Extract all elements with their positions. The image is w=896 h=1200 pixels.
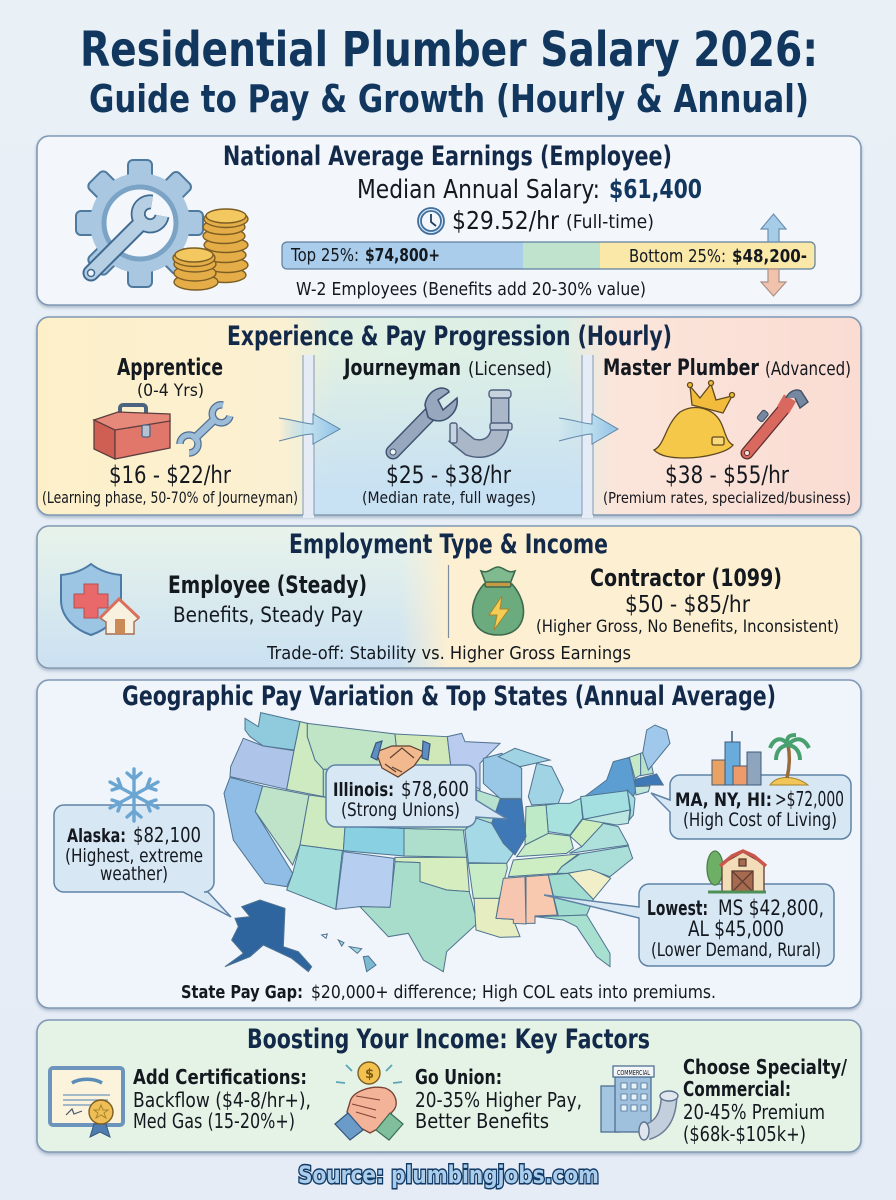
- icon: gear and wrench: [76, 160, 203, 287]
- callout: lowest states: [544, 851, 834, 966]
- column: apprentice: [42, 355, 298, 507]
- icon: pipe wrench: [744, 390, 808, 456]
- range bar: [282, 242, 815, 269]
- callout: MA NY HI: MA, NY, HI:: [675, 789, 772, 811]
- journeyman rate: $25 - $38/hr: [386, 461, 511, 489]
- callout: Alaska: [54, 769, 231, 917]
- callout: Illinois: (Strong Unions): [341, 799, 460, 821]
- union text: Go Union:: [415, 1065, 502, 1089]
- heading: experience: Experience & Pay Progression (Hourly): [227, 321, 672, 352]
- apprentice rate: $16 - $22/hr: [109, 461, 231, 489]
- callout: Alaska: weather): [100, 863, 168, 885]
- master label: (Advanced): [765, 358, 851, 380]
- union text: [415, 1065, 582, 1133]
- map: United States by state pay: [224, 713, 670, 972]
- callout: lowest states: MS $42,800,: [718, 896, 824, 920]
- range bar: Top 25%:: [290, 245, 359, 266]
- note: state pay gap: State Pay Gap:: [181, 982, 303, 1003]
- callout: MA NY HI: [651, 731, 851, 839]
- icon: adjustable wrench: [390, 388, 457, 455]
- hourly rate: [452, 206, 654, 235]
- callout: lowest states: (Lower Demand, Rural): [651, 939, 821, 961]
- certifications text: [133, 1065, 311, 1133]
- icon: crown and hard hat: [654, 380, 734, 458]
- icon: money bag: [472, 567, 524, 635]
- union text: Better Benefits: [415, 1109, 549, 1133]
- journeyman label: Journeyman: [342, 356, 461, 381]
- panel: geographic pay variation: [37, 680, 861, 1008]
- note: state pay gap: [181, 982, 716, 1003]
- journeyman note: (Median rate, full wages): [362, 488, 536, 507]
- arrow: apprentice to journeyman: [279, 414, 340, 444]
- callout: lowest states: Lowest:: [647, 896, 708, 920]
- median annual salary: Median Annual Salary:: [357, 175, 600, 205]
- title: [80, 22, 818, 121]
- apprentice label: Apprentice: [117, 355, 223, 381]
- apprentice note: (Learning phase, 50-70% of Journeyman): [42, 488, 298, 507]
- callout: Alaska: (Highest, extreme: [65, 845, 203, 867]
- master label: Master Plumber: [603, 356, 759, 381]
- panel: employment type and income: [37, 526, 861, 668]
- icon: spanner: [180, 405, 230, 453]
- specialty text: 20-45% Premium: [683, 1100, 825, 1124]
- contractor block: Contractor (1099): [590, 564, 782, 592]
- certifications text: Backflow ($4-8/hr+),: [133, 1088, 311, 1112]
- icon: shield with house: [61, 564, 139, 635]
- icon: coin stacks: [173, 209, 248, 290]
- certifications text: Med Gas (15-20%+): [133, 1109, 295, 1133]
- arrow: journeyman to master: [559, 414, 618, 444]
- panel: experience and pay progression: [37, 317, 861, 518]
- icon: clock: [418, 208, 444, 234]
- icon: clasped hands with coin: $: [365, 1067, 374, 1082]
- specialty text: [683, 1055, 848, 1146]
- master rate: $38 - $55/hr: [665, 461, 789, 489]
- callout: Illinois: $78,600: [401, 777, 469, 801]
- icon: pipe: [450, 390, 512, 449]
- callout: Illinois: [326, 741, 507, 827]
- icon: commercial building and pipe: [601, 1066, 678, 1140]
- certifications text: Add Certifications:: [133, 1065, 307, 1089]
- employee block: [168, 571, 367, 627]
- note: state pay gap: $20,000+ difference; High COL eats into premiums.: [311, 982, 716, 1003]
- callout: MA NY HI: >$72,000: [775, 787, 844, 811]
- range bar: Bottom 25%:: [629, 246, 726, 267]
- icon: snowflake: [110, 769, 158, 821]
- icon: clasped hands with coin: [335, 1062, 403, 1140]
- hourly rate: $29.52/hr: [452, 206, 560, 235]
- callout: Illinois: Illinois:: [333, 779, 394, 801]
- column: journeyman: [342, 356, 552, 507]
- icon: city and palm: [712, 731, 809, 785]
- column: master plumber: [603, 356, 851, 507]
- heading: employment type: Employment Type & Income: [289, 529, 608, 560]
- hourly rate: (Full-time): [566, 211, 654, 233]
- employee block: Benefits, Steady Pay: [173, 603, 363, 627]
- callout: Alaska: $82,100: [133, 823, 201, 847]
- icon: certificate: [50, 1068, 123, 1137]
- icon: toolbox: [94, 405, 170, 459]
- apprentice years: (0-4 Yrs): [137, 381, 204, 401]
- icon: handshake: [371, 741, 430, 777]
- employee block: Employee (Steady): [168, 571, 367, 599]
- journeyman label: (Licensed): [468, 358, 552, 380]
- median annual salary: $61,400: [609, 175, 702, 205]
- source line: Source: plumbingjobs.com: [298, 1161, 599, 1189]
- range bar: $74,800+: [365, 245, 440, 266]
- union text: 20-35% Higher Pay,: [415, 1088, 582, 1112]
- contractor block: [536, 564, 839, 637]
- specialty text: Commercial:: [683, 1077, 791, 1101]
- trade-off note: Trade-off: Stability vs. Higher Gross Earnings: [266, 643, 631, 664]
- range bar: $48,200-: [732, 246, 807, 267]
- contractor block: $50 - $85/hr: [625, 592, 750, 618]
- note: W-2 employees: W-2 Employees (Benefits add 20-30% value): [296, 279, 646, 300]
- icon: commercial building and pipe: COMMERCIAL: [617, 1069, 650, 1077]
- specialty text: Choose Specialty/: [683, 1055, 848, 1079]
- master note: (Premium rates, specialized/business): [603, 489, 851, 507]
- heading: boosting income: Boosting Your Income: Key Factors: [247, 1024, 650, 1055]
- panel: boosting your income: [37, 1020, 861, 1152]
- heading: national average earnings: National Average Earnings (Employee): [223, 141, 672, 172]
- panel: national average earnings: [37, 136, 861, 305]
- icon: up arrow: [761, 214, 786, 242]
- icon: down arrow: [761, 269, 786, 296]
- contractor block: (Higher Gross, No Benefits, Inconsistent): [536, 617, 839, 637]
- specialty text: ($68k-$105k+): [683, 1122, 806, 1146]
- callout: Alaska: Alaska:: [67, 825, 126, 847]
- icon: barn: [707, 851, 766, 892]
- callout: MA NY HI: (High Cost of Living): [683, 809, 837, 831]
- callout: lowest states: AL $45,000: [688, 917, 784, 941]
